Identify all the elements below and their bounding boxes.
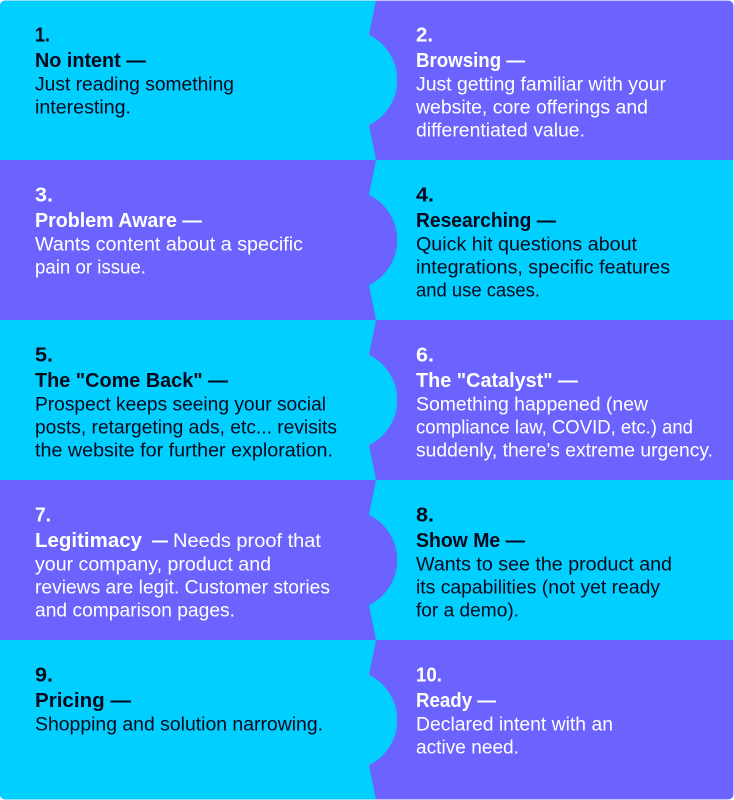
text block: 8 show me: Wants to see the product and	[416, 554, 672, 576]
text block: 9 pricing	[35, 664, 323, 736]
text block: 3 problem aware: 3.	[35, 184, 53, 206]
text block: 5 the come back: The "Come Back" —	[35, 370, 228, 392]
text block: 5 the come back: Prospect keeps seeing your social	[35, 394, 326, 416]
text block: 6 the catalyst: compliance law, COVID, etc.) and	[416, 418, 693, 438]
text block: 2 browsing	[415, 24, 667, 142]
text block: 4 researching: and use cases.	[416, 280, 540, 302]
text block: 6 the catalyst: 6.	[416, 344, 434, 366]
text block: 5 the come back: the website for further exploration.	[35, 440, 333, 462]
text block: 10 ready: 10.	[416, 664, 442, 686]
text block: 5 the come back: posts, retargeting ads, etc... revisits	[35, 418, 337, 438]
text block: 3 problem aware: Problem Aware —	[35, 210, 202, 232]
text block: 6 the catalyst: Something happened (new	[416, 394, 648, 416]
text block: 9 pricing: Shopping and solution narrowing.	[35, 714, 323, 736]
text block: 2 browsing: differentiated value.	[416, 120, 585, 142]
text block: 8 show me	[416, 504, 672, 622]
panel: 9 pricing	[0, 640, 734, 800]
text block: 2 browsing: Just getting familiar with your	[416, 74, 667, 96]
text block: 3 problem aware: pain or issue.	[35, 258, 146, 278]
text block: 6 the catalyst: suddenly, there's extreme urgency.	[416, 440, 713, 462]
text block: 4 researching: Quick hit questions about	[416, 234, 638, 256]
text block: 2 browsing: website, core offerings and	[415, 98, 648, 118]
text block: 7 legitimacy: your company, product and	[35, 554, 271, 576]
text block: 4 researching: Researching —	[416, 210, 556, 232]
text block: 7 legitimacy: and comparison pages.	[35, 600, 235, 622]
text block: 8 show me: for a demo).	[416, 600, 519, 622]
text block: 10 ready: Ready —	[416, 690, 496, 712]
text block: 6 the catalyst	[416, 344, 713, 462]
text block: 7 legitimacy: Legitimacy	[35, 530, 143, 552]
text block: 1 no intent: interesting.	[35, 98, 131, 118]
text block: 5 the come back	[35, 344, 337, 462]
text block: 1 no intent: 1.	[35, 24, 50, 46]
text block: 7 legitimacy: reviews are legit. Customer stories	[35, 578, 330, 598]
text block: 9 pricing: Pricing —	[35, 690, 131, 712]
text block: 3 problem aware: Wants content about a specific	[35, 234, 303, 256]
panel: 1 no intent	[0, 0, 734, 160]
text block: 3 problem aware	[35, 184, 303, 278]
text block: 10 ready: active need.	[416, 738, 519, 758]
text block: 5 the come back: 5.	[35, 344, 53, 366]
text block: 1 no intent: No intent —	[35, 50, 146, 72]
text block: 4 researching	[416, 184, 670, 302]
text block: 7 legitimacy	[35, 504, 330, 622]
text block: 10 ready	[416, 664, 613, 758]
text block: 6 the catalyst: The "Catalyst" —	[416, 370, 578, 392]
panel: 3 problem aware	[0, 160, 734, 320]
text block: 2 browsing: 2.	[416, 24, 433, 46]
panel: 7 legitimacy	[0, 480, 734, 640]
text block: 7 legitimacy: 7.	[35, 504, 51, 526]
text block: 9 pricing: 9.	[35, 664, 53, 686]
text block: 2 browsing: Browsing —	[416, 50, 525, 72]
panel: 5 the come back	[0, 320, 734, 480]
text block: 1 no intent	[35, 24, 234, 118]
text block: 7 legitimacy: —	[152, 530, 168, 552]
text block: 8 show me: its capabilities (not yet ready	[416, 578, 661, 598]
text block: 1 no intent: Just reading something	[35, 74, 234, 96]
text block: 10 ready: Declared intent with an	[416, 714, 613, 736]
text block: 8 show me: Show Me —	[416, 530, 525, 552]
text block: 8 show me: 8.	[416, 504, 434, 526]
text block: 4 researching: integrations, specific features	[416, 258, 670, 278]
text block: 4 researching: 4.	[416, 184, 434, 206]
text block: 7 legitimacy: Needs proof that	[173, 531, 322, 552]
